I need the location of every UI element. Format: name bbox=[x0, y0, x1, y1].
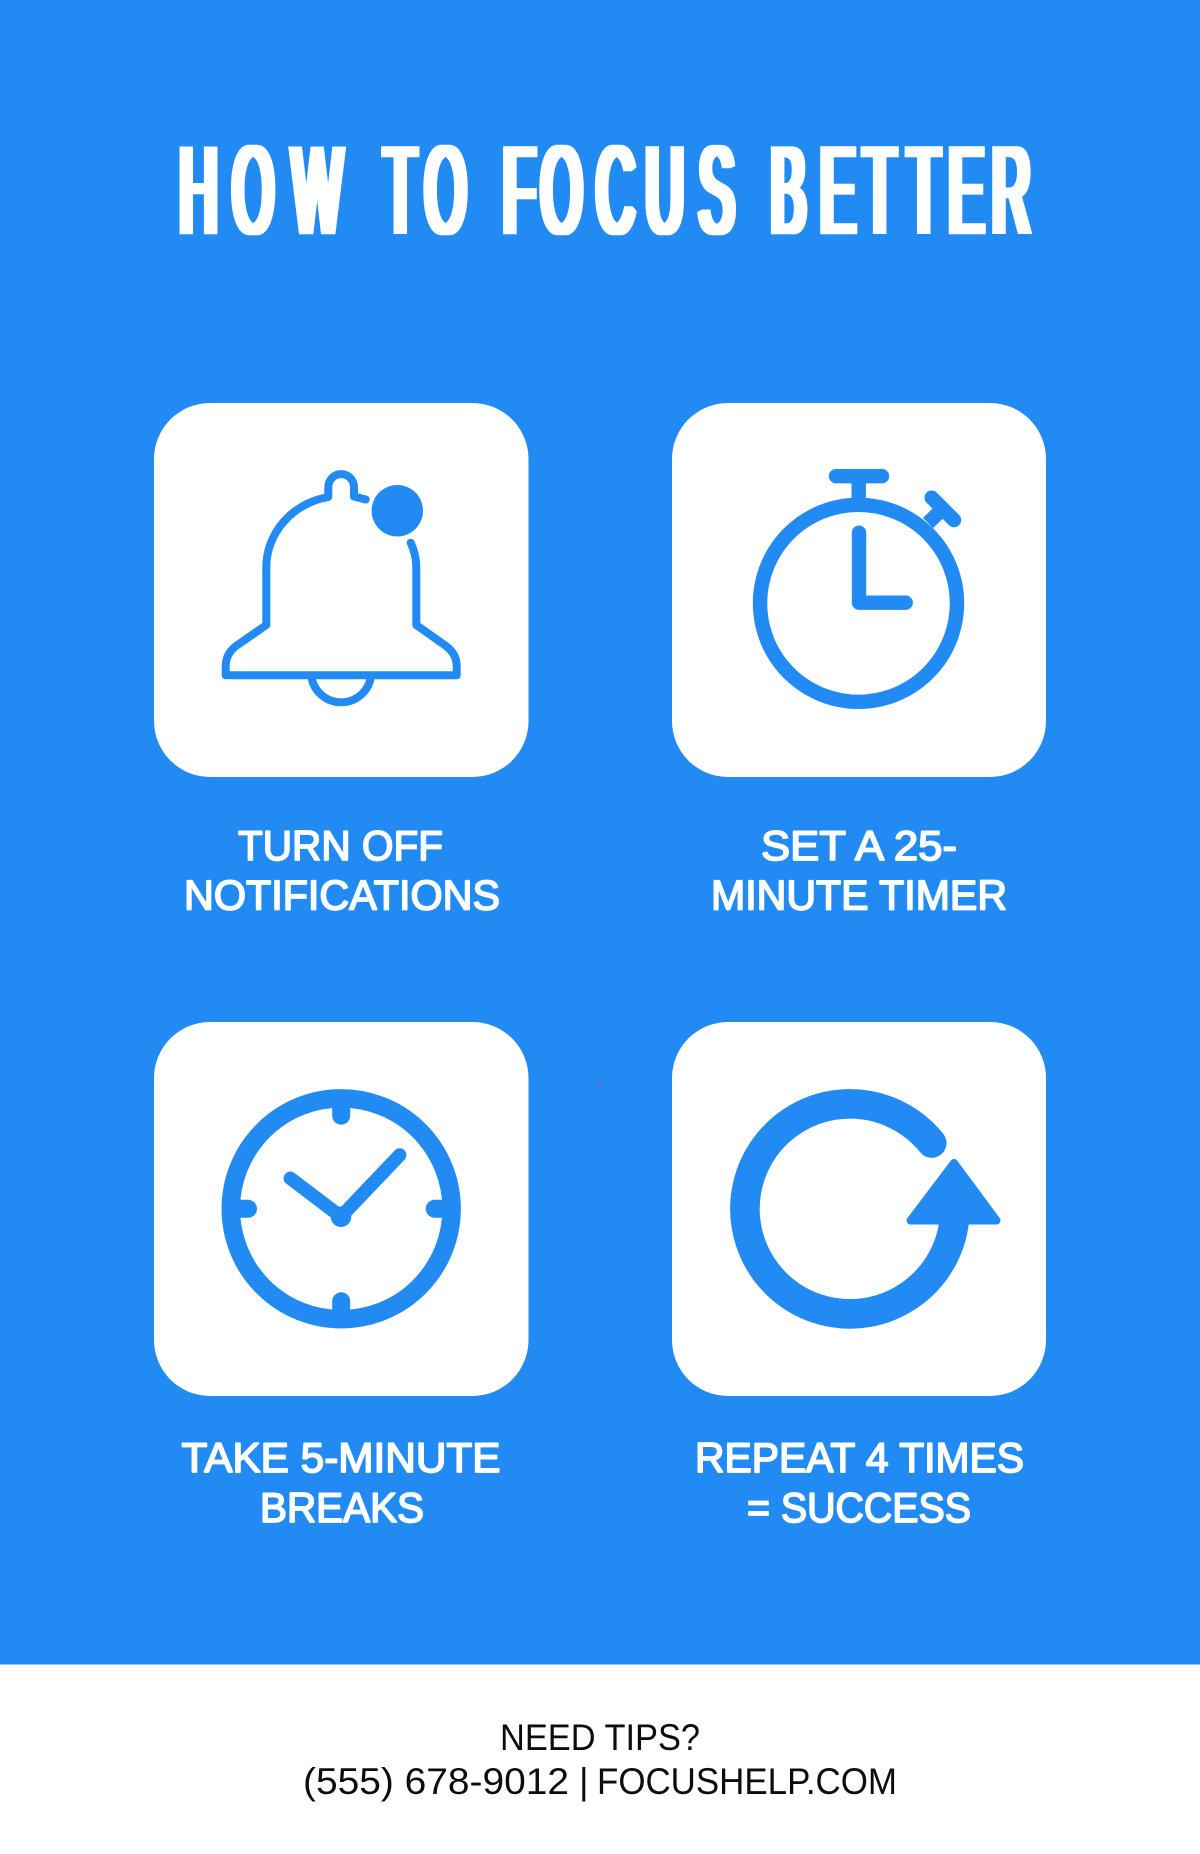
footer band bbox=[0, 1664, 1200, 1854]
label: set a 25-minute timer: MINUTE TIMER bbox=[711, 872, 1007, 919]
card: clock bbox=[154, 1022, 528, 1396]
card: stopwatch bbox=[672, 403, 1046, 777]
footer text: contact bbox=[303, 1717, 897, 1802]
panel: repeat 4 times = success bbox=[672, 1022, 1046, 1531]
label: take 5-minute breaks bbox=[182, 1434, 501, 1531]
footer text: contact: NEED TIPS? bbox=[500, 1717, 700, 1758]
label: take 5-minute breaks: BREAKS bbox=[260, 1484, 424, 1531]
card: repeat arrow bbox=[672, 1022, 1046, 1396]
icon: stopwatch bbox=[760, 476, 957, 702]
icon: clock bbox=[231, 1098, 452, 1319]
card: bell bbox=[154, 403, 528, 777]
label: repeat 4 times = success: REPEAT 4 TIMES bbox=[695, 1434, 1024, 1481]
label: turn off notifications: NOTIFICATIONS bbox=[184, 872, 500, 919]
title: HOW TO FOCUS BETTER bbox=[180, 121, 1030, 261]
footer text: contact: | bbox=[579, 1761, 589, 1802]
label: repeat 4 times = success bbox=[695, 1434, 1024, 1531]
panel: take 5-minute breaks bbox=[154, 1022, 528, 1531]
label: turn off notifications bbox=[184, 822, 500, 919]
label: set a 25-minute timer bbox=[711, 822, 1007, 919]
icon: bell with notification dot bbox=[226, 474, 457, 702]
label: take 5-minute breaks: TAKE 5-MINUTE bbox=[182, 1434, 501, 1481]
label: turn off notifications: TURN OFF bbox=[238, 822, 443, 869]
icon: circular repeat arrow bbox=[745, 1104, 996, 1314]
footer text: contact: (555) 678-9012 bbox=[303, 1761, 569, 1802]
label: repeat 4 times = success: = SUCCESS bbox=[747, 1484, 971, 1531]
panel: set a 25-minute timer bbox=[672, 403, 1046, 919]
panel: turn off notifications bbox=[154, 403, 528, 919]
label: set a 25-minute timer: SET A 25- bbox=[761, 822, 957, 869]
footer text: contact: FOCUSHELP.COM bbox=[597, 1761, 897, 1802]
